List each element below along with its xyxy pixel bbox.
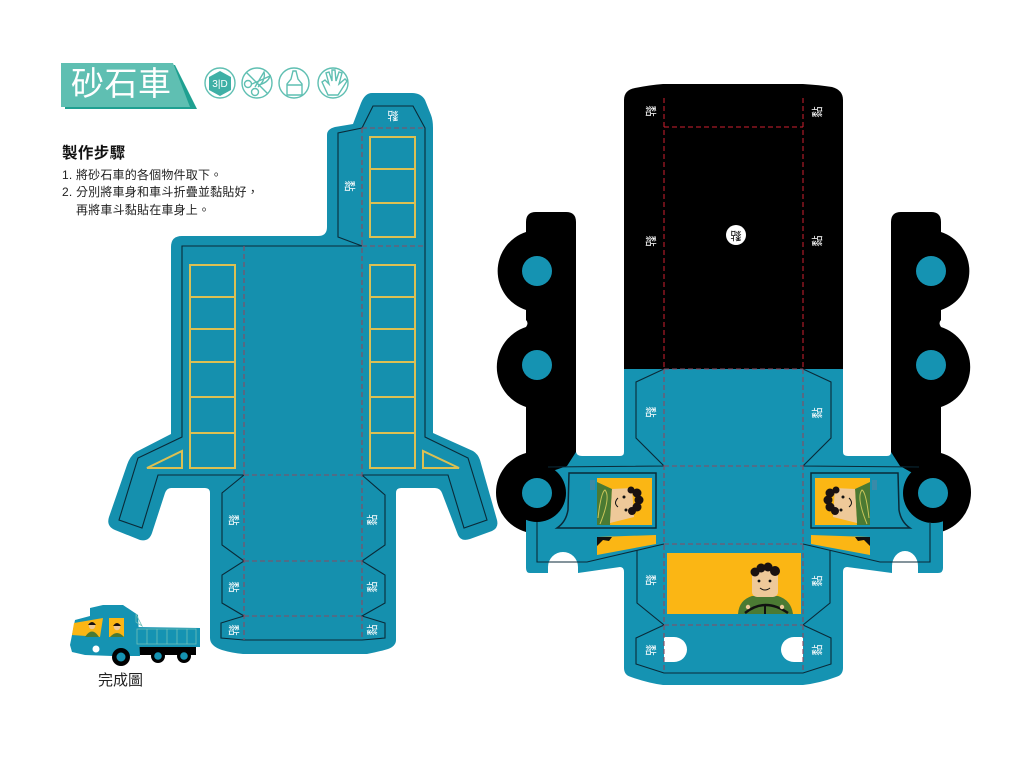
teal cab body: [526, 369, 943, 685]
caption: finished truck: 完成圖: [98, 672, 143, 689]
icon: scissors: [242, 68, 272, 98]
wheel: right front: [903, 463, 963, 523]
icon: glue bottle: [279, 68, 309, 98]
truck chassis: [128, 647, 196, 655]
cab fold lines: [664, 369, 803, 673]
bed cut lines: [119, 106, 487, 640]
bed slats left: [147, 265, 235, 468]
glue labels: 黏: [644, 106, 658, 116]
glue labels: 黏: [365, 582, 379, 592]
glue labels: 黏: [343, 180, 357, 192]
glue labels: 黏: [810, 644, 824, 656]
icon: 3D: 3|D: [212, 79, 228, 90]
glue labels: 黏: [730, 229, 742, 243]
cargo panel fold lines: [664, 98, 803, 369]
panel: truck cab and chassis cut-out: [496, 84, 971, 685]
bed outline: [108, 93, 497, 654]
glue labels: 黏: [227, 582, 241, 592]
truck headlight: [92, 646, 100, 652]
glue labels: 黏: [644, 574, 658, 586]
heading: steps: 製作步驟: [62, 143, 126, 162]
wheel: left front: [508, 464, 566, 522]
truck windshield: [72, 618, 103, 637]
panel: truck bed cut-out: [108, 93, 497, 654]
truck side window: [109, 618, 124, 637]
bed slats right: [370, 137, 459, 468]
icons: tools needed: [205, 68, 348, 98]
truck bed: [128, 627, 200, 647]
glue labels: 黏: [644, 644, 658, 656]
glue dot: [726, 225, 746, 245]
lower side window left: [597, 535, 656, 555]
truck bed slats: [136, 614, 196, 644]
title banner: [61, 63, 197, 109]
left wheel strip: [496, 212, 576, 534]
black top of cargo panel: [624, 84, 843, 369]
glue labels: [644, 106, 824, 656]
glue labels: 黏: [810, 106, 824, 118]
side window right: [815, 478, 877, 525]
cab cut lines: [537, 369, 930, 673]
text block: instructions: 再將車斗黏貼在車身上。: [76, 202, 210, 217]
headlight holes: [664, 637, 803, 662]
text block: instructions: 1. 將砂石車的各個物件取下。: [62, 167, 222, 182]
glue labels: 黏: [810, 236, 824, 246]
lower side window right: [811, 535, 870, 555]
glue labels: 黏: [644, 406, 658, 418]
glue labels: 黏: [810, 408, 824, 418]
glue labels: 黏: [227, 514, 241, 526]
front windshield: [667, 553, 801, 614]
right wheel strip: [891, 212, 971, 534]
glue labels: 黏: [644, 236, 658, 246]
truck wheels: [112, 648, 191, 666]
glue labels: 黏: [810, 576, 824, 586]
wheel hubs: [522, 256, 948, 508]
title banner: 砂石車: [71, 65, 172, 102]
glue labels: 黏: [388, 109, 398, 123]
truck cab: [70, 605, 140, 656]
bed fold lines: [244, 128, 425, 640]
icon: hand: [318, 68, 348, 98]
glue labels: 黏: [365, 514, 379, 526]
driver: [738, 562, 793, 614]
text block: instructions: 2. 分別將車身和車斗折疊並黏貼好，: [62, 184, 259, 199]
finished truck illustration: [70, 605, 200, 666]
glue labels: [227, 109, 398, 636]
side window left: [590, 478, 652, 525]
icon: 3D: [205, 68, 235, 98]
glue labels: 黏: [365, 624, 379, 636]
text block: instructions: [62, 167, 259, 217]
truck drivers: [85, 622, 124, 637]
glue labels: 黏: [227, 624, 241, 636]
